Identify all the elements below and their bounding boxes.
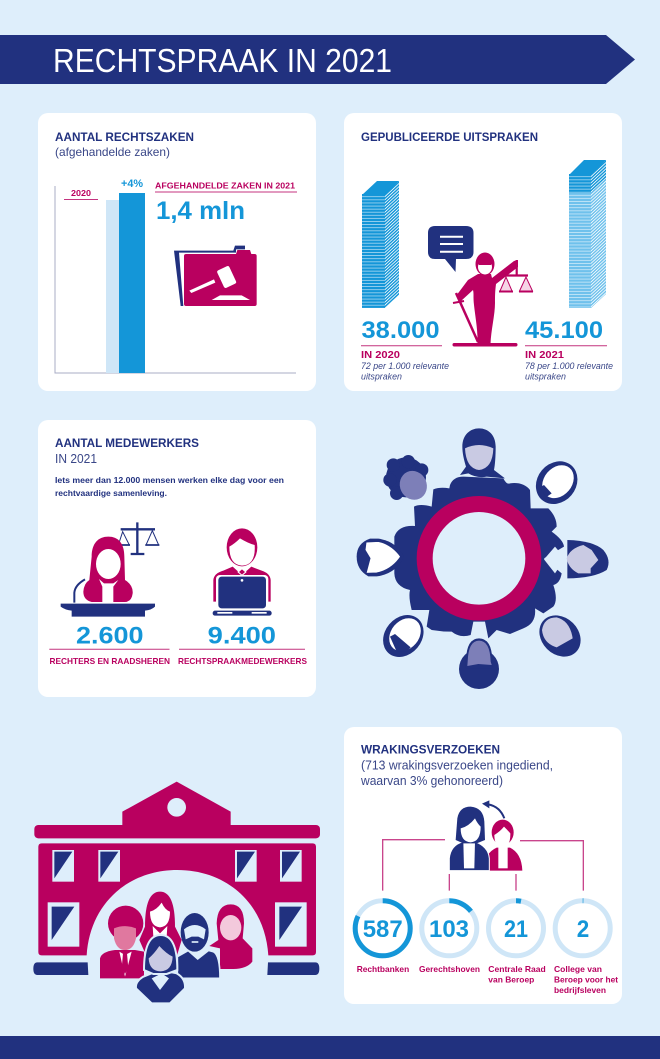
illustration: people around a table [357,428,609,689]
intro text: rechtvaardige samenleving. [55,489,167,498]
stat 2020: 72 per 1.000 relevante [361,361,449,371]
person: upper right [527,453,586,512]
stat 2020: uitspraken [361,372,402,382]
person: left [357,539,404,576]
label: rechtbanken: Rechtbanken [357,964,409,974]
subheading [360,758,553,788]
icon: lady justice [452,252,533,346]
stat: rechters [49,622,170,666]
panel: gepubliceerde uitspraken [344,113,622,391]
stat 2021: IN 2021 [525,349,564,361]
panel: wrakingsverzoeken [344,727,622,1004]
stat: medewerkers: RECHTSPRAAKMEDEWERKERS [178,656,307,666]
donut: centrale raad [488,901,544,956]
label: centrale raad van beroep: van Beroep [488,975,534,985]
label: college van beroep: Beroep voor het [554,975,618,985]
heading: WRAKINGSVERZOEKEN [361,742,500,756]
building facade [38,843,316,955]
person: bottom [459,638,499,689]
table and bodies [394,477,564,638]
person: right [544,540,609,578]
title banner [0,35,635,84]
person: woman with hijab [209,904,252,969]
heading: AANTAL MEDEWERKERS [55,436,199,450]
icon: staff member with laptop [213,528,272,616]
donut: rechtbanken [355,901,410,956]
icon: judge with scales [61,522,159,617]
bar chart: 2020 [71,188,91,198]
ground [33,962,319,975]
person: bearded man [177,913,220,978]
donut: centrale raad: 21 [504,916,528,943]
icon: paper stack 2021 [569,160,606,308]
intro text: Iets meer dan 12.000 mensen werken elke dag voor een [55,476,284,485]
subheading: waarvan 3% gehonoreerd) [360,774,503,788]
icon: speech bubble [428,226,474,272]
subheading: (713 wrakingsverzoeken ingediend, [361,758,553,772]
stat label: AFGEHANDELDE ZAKEN IN 2021 [155,180,295,190]
label: college van beroep [554,964,618,995]
stat value: 1,4 mln [156,197,245,225]
stat 2020: IN 2020 [361,349,400,361]
windows [48,850,307,947]
stat 2020 [361,317,449,382]
label: centrale raad van beroep: Centrale Raad [488,964,546,974]
illustration: court building with people [33,782,320,1003]
label: gerechtshoven: Gerechtshoven [419,964,480,974]
person: man with suit [100,906,144,978]
stat 2021 [525,317,613,382]
panel: aantal rechtszaken [38,113,316,391]
person: afro upper left [383,455,432,504]
icon: paper stack 2020 [362,181,399,308]
ring table [425,504,533,613]
person: top [460,428,505,478]
roof pediment [122,782,231,827]
heading: GEPUBLICEERDE UITSPRAKEN [361,130,538,144]
icon: two judges with arrow [449,800,522,871]
person: woman back [139,892,182,957]
donut: college van beroep [555,901,610,956]
stat: rechters: 2.600 [76,622,144,650]
label: centrale raad van beroep [488,964,546,985]
donut: gerechtshoven: 103 [429,916,469,943]
label: college van beroep: bedrijfsleven [554,985,606,995]
stat 2021: 78 per 1.000 relevante [525,361,613,371]
subheading: (afgehandelde zaken) [55,145,170,159]
panel: aantal medewerkers [38,420,316,697]
stat 2021: uitspraken [525,372,566,382]
subheading: IN 2021 [55,452,97,466]
label: college van beroep: College van [554,964,602,974]
bar chart [55,178,296,373]
stat: medewerkers [178,622,307,666]
title: RECHTSPRAAK IN 2021 [53,42,392,79]
donut: college van beroep: 2 [577,916,589,943]
icon: connector lines [383,840,583,891]
donut: rechtbanken: 587 [363,916,403,943]
heading: AANTAL RECHTSZAKEN [55,130,194,144]
stat: medewerkers: 9.400 [208,622,276,650]
donut: gerechtshoven [422,901,477,956]
person: lower left [375,607,432,665]
footer band [0,1036,660,1059]
intro text [55,476,284,498]
stat 2021: 45.100 [525,317,603,344]
bar chart: +4% [121,178,143,190]
stat 2020: 38.000 [362,317,440,344]
stat: rechters: RECHTERS EN RAADSHEREN [50,656,170,666]
person: lower right [531,607,589,665]
person: woman front [136,935,185,1003]
icon: folder with gavel [174,246,257,306]
